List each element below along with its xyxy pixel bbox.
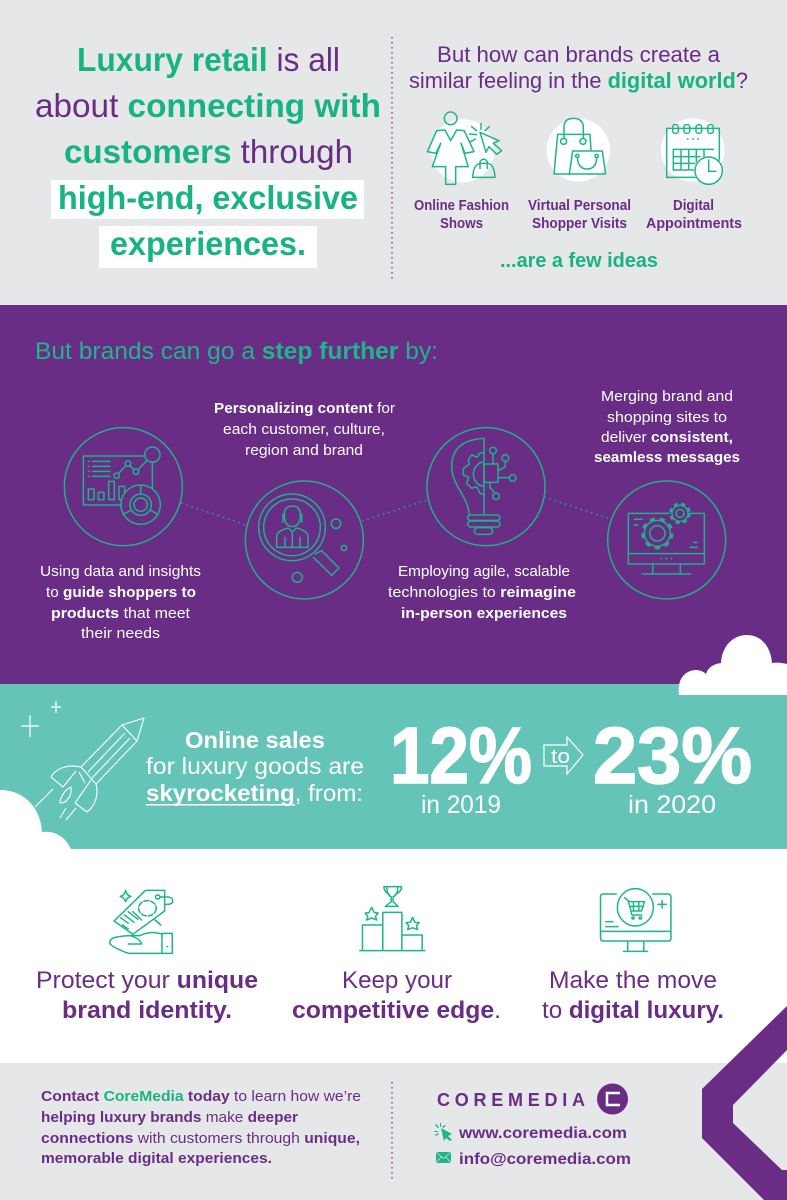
stat: 12 percent in 2019: 12% [390, 711, 532, 800]
heading: digital world question: similar feeling in the digital world? [409, 68, 748, 93]
text: keep competitive edge [292, 967, 501, 1024]
text: protect brand identity: brand identity. [62, 997, 232, 1024]
text: protect brand identity: Protect your unique [36, 967, 258, 994]
text: using data and insights: to guide shoppers to [46, 585, 196, 601]
text: idea labels: Shopper Visits [532, 216, 627, 232]
stat: 23 percent in 2020: 23% [593, 711, 752, 800]
text: personalizing content: Personalizing content for [214, 401, 395, 417]
logo: CoreMedia: COREMEDIA [437, 1090, 585, 1110]
connector lines [181, 497, 610, 525]
arrow: to: to [551, 746, 570, 768]
text: employing agile technologies: in-person experiences [401, 606, 567, 622]
heading: luxury retail statement [35, 41, 381, 268]
heading: luxury retail statement: high-end, exclusive [58, 179, 358, 216]
text: merging brand and shopping sites: Merging brand and [601, 389, 733, 405]
panel: purple steps background [0, 305, 787, 684]
text: using data and insights: Using data and insights [40, 564, 201, 580]
icon: data and insights dashboard [64, 428, 182, 546]
heading: digital world question [409, 42, 748, 93]
panel: footer background [0, 1063, 787, 1200]
panel: top intro background [0, 0, 787, 305]
icon: monitor with shopping cart [601, 889, 671, 951]
text: employing agile technologies [388, 564, 576, 622]
text: protect brand identity [36, 967, 258, 1024]
text: move to digital luxury [542, 967, 724, 1024]
text: contact call to action: Contact CoreMedia today to learn how we’re [41, 1089, 361, 1105]
text: contact call to action [41, 1089, 361, 1167]
text: contact call to action: memorable digital experiences. [41, 1151, 272, 1167]
text: idea labels: Online Fashion [414, 198, 509, 214]
arrow: to [544, 737, 583, 774]
icon: personalization magnifier [245, 481, 363, 599]
text: idea labels: Virtual Personal [528, 198, 631, 214]
text: merging brand and shopping sites: seamless messages [594, 450, 740, 466]
text: idea labels: Appointments [646, 216, 742, 232]
text: employing agile technologies: technologies to reimagine [388, 585, 576, 601]
panel: white benefits background [0, 849, 787, 1063]
icon: light bulb with gear and circuit [427, 428, 545, 546]
text: idea labels [414, 198, 742, 232]
text: contact call to action: connections with customers through unique, [41, 1131, 360, 1147]
text: idea labels: Digital [673, 198, 714, 214]
heading: luxury retail statement: Luxury retail is all [77, 41, 340, 78]
stat: 23 percent in 2020: in 2020 [628, 791, 716, 819]
text: keep competitive edge: competitive edge . [292, 997, 501, 1024]
heading: digital world question: But how can brands create a [437, 42, 721, 67]
text: online sales: for luxury goods are [146, 753, 364, 779]
stat: 12 percent in 2019: in 2019 [421, 791, 501, 819]
text: personalizing content: each customer, culture, [223, 422, 385, 438]
text: contact call to action: helping luxury brands make deeper [41, 1110, 298, 1126]
text: personalizing content: region and brand [245, 443, 363, 459]
text: are a few ideas: ...are a few ideas [500, 250, 658, 272]
text: move to digital luxury: Make the move [549, 967, 717, 994]
cloud: top right [679, 635, 787, 695]
icon: monitor with gears [608, 481, 726, 599]
text: website: www.coremedia.com [458, 1125, 627, 1142]
logo: CoreMedia [437, 1084, 628, 1114]
icon: digital calendar [661, 118, 724, 184]
text: using data and insights: products that meet [51, 606, 190, 622]
text: move to digital luxury: to digital luxury. [542, 997, 724, 1024]
icon: podium and trophy [360, 887, 425, 951]
text: online sales: Online sales [185, 727, 325, 753]
heading: step further: But brands can go a step further by: [35, 338, 438, 365]
heading: luxury retail statement: experiences. [110, 225, 306, 262]
text: email: info@coremedia.com [459, 1151, 631, 1168]
cloud: bottom left [0, 790, 71, 849]
icon: price tag over hand [110, 890, 173, 953]
panel: teal statistics background [0, 684, 787, 849]
text: keep competitive edge: Keep your [342, 967, 452, 994]
icon: online fashion show [427, 112, 502, 184]
text: using data and insights: their needs [81, 626, 160, 642]
text: idea labels: Shows [440, 216, 483, 232]
icon: cursor click [434, 1123, 452, 1141]
heading: luxury retail statement: about connecting with [35, 87, 381, 124]
icon: envelope [436, 1152, 451, 1163]
text: personalizing content [214, 401, 395, 459]
icon: pencil rocket [35, 718, 144, 820]
decorative hexagon shape [702, 1006, 787, 1200]
text: online sales [146, 727, 364, 806]
icon: shopping bags [547, 118, 610, 182]
text: merging brand and shopping sites: shopping sites to [607, 410, 727, 426]
heading: luxury retail statement: customers through [64, 133, 353, 170]
icon: sparkle plus signs [21, 701, 61, 737]
text: merging brand and shopping sites [594, 389, 740, 466]
text: merging brand and shopping sites: deliver consistent, [601, 430, 733, 446]
text: using data and insights [40, 564, 201, 642]
text: employing agile technologies: Employing agile, scalable [398, 564, 570, 580]
text: online sales: skyrocketing , from: [146, 780, 363, 806]
